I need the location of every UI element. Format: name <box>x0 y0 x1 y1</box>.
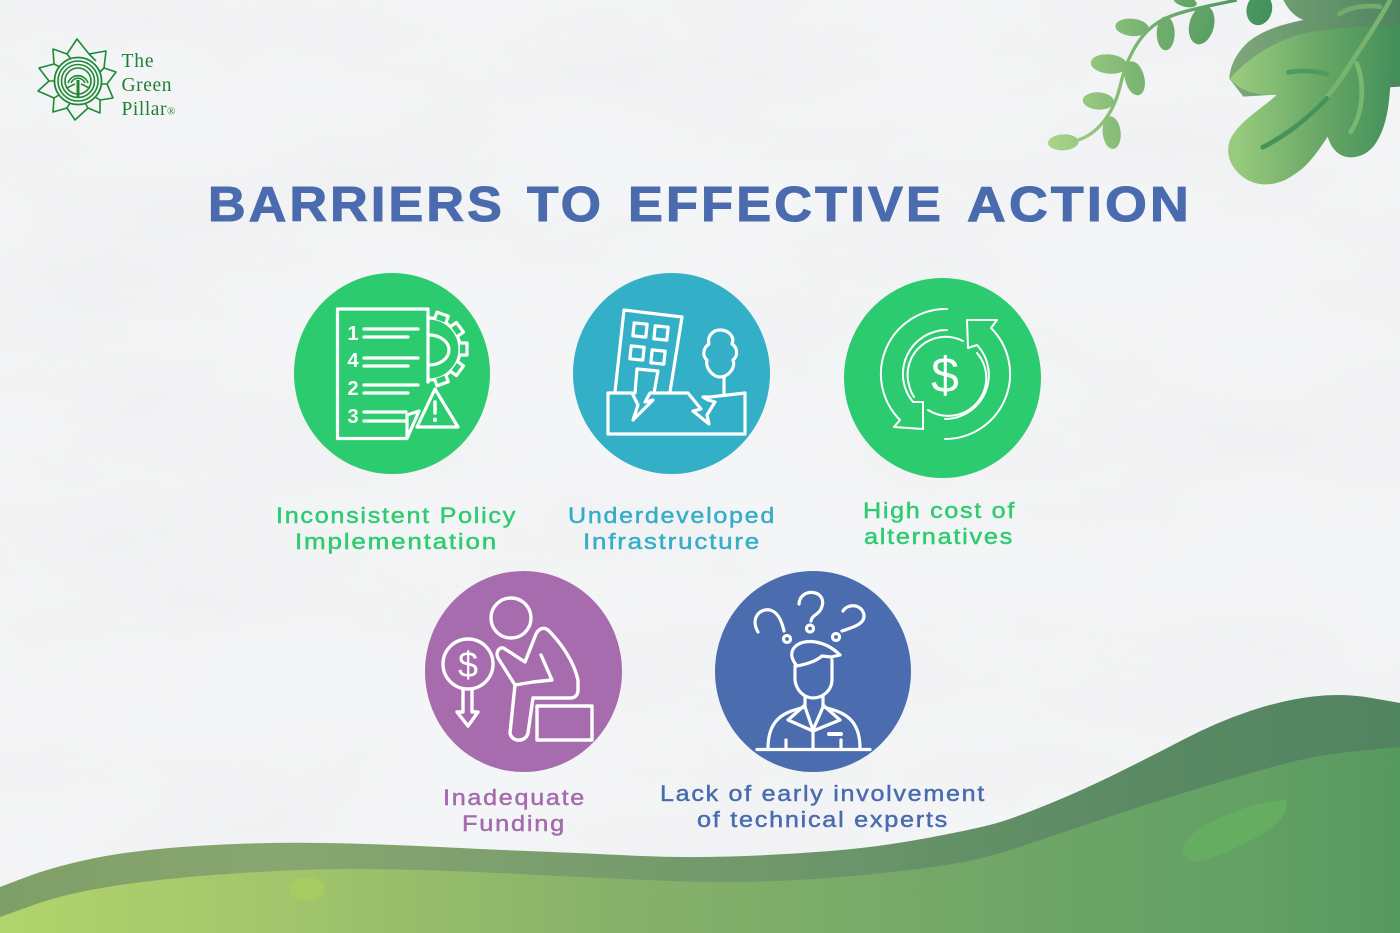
title: TO <box>527 178 604 232</box>
circle icon: circular arrows around dollar: $ <box>931 347 959 403</box>
label: High cost of <box>863 498 1016 523</box>
title: ACTION <box>967 178 1192 232</box>
logo wordmark: Pillar <box>122 99 167 120</box>
logo wordmark: ® <box>167 106 175 118</box>
logo wordmark: Green <box>122 75 172 96</box>
title: EFFECTIVE <box>628 178 944 232</box>
label: alternatives <box>864 524 1014 549</box>
leaf veins <box>1263 0 1390 147</box>
label: Inadequate <box>443 785 586 810</box>
title <box>208 178 1192 232</box>
circle icon: policy document with gear and warning: 2 <box>347 378 359 400</box>
circle icon: policy document with gear and warning: 4 <box>347 350 359 372</box>
item: underdeveloped infrastructure <box>568 273 776 554</box>
logo emblem <box>38 39 116 120</box>
label <box>568 503 776 554</box>
vine <box>1048 0 1275 151</box>
item: inconsistent policy implementation <box>276 273 517 554</box>
item: inadequate funding <box>425 571 622 836</box>
circle icon: policy document with gear and warning: 1 <box>347 323 359 345</box>
front hill <box>0 747 1400 933</box>
circle icon: circular arrows around dollar <box>844 278 1041 478</box>
decoration: leaves top right <box>1048 0 1400 184</box>
circle icon: cracked ground with leaning building and tree <box>573 273 770 474</box>
label: Inconsistent Policy <box>276 503 517 528</box>
big leaf back <box>1229 0 1400 97</box>
label <box>276 503 517 554</box>
circle icon: policy document with gear and warning <box>294 273 490 474</box>
logo wordmark <box>122 51 175 120</box>
big leaf front <box>1228 25 1400 184</box>
label: Infrastructure <box>583 529 761 554</box>
large leaf accent right <box>1182 800 1287 861</box>
label <box>660 781 986 832</box>
decoration: green hills at bottom <box>0 695 1400 933</box>
label: Lack of early involvement <box>660 781 986 806</box>
item: lack of early involvement of technical experts <box>660 571 986 832</box>
label: Funding <box>462 811 566 836</box>
circle icon: policy document with gear and warning: 3 <box>347 406 359 428</box>
label: Underdeveloped <box>568 503 776 528</box>
logo: The Green Pillar <box>38 39 175 120</box>
label <box>863 498 1016 549</box>
circle icon: seated person with falling dollar: $ <box>458 644 478 685</box>
title: BARRIERS <box>208 178 505 232</box>
item: high cost of alternatives <box>844 278 1041 549</box>
label <box>443 785 586 836</box>
label: Implementation <box>295 529 498 554</box>
logo wordmark: The <box>122 51 154 72</box>
small leaf accent left <box>289 877 325 901</box>
circle icon: confused person with question marks <box>715 571 911 772</box>
back hill <box>0 695 1400 933</box>
label: of technical experts <box>697 807 949 832</box>
circle icon: seated person with falling dollar <box>425 571 622 772</box>
